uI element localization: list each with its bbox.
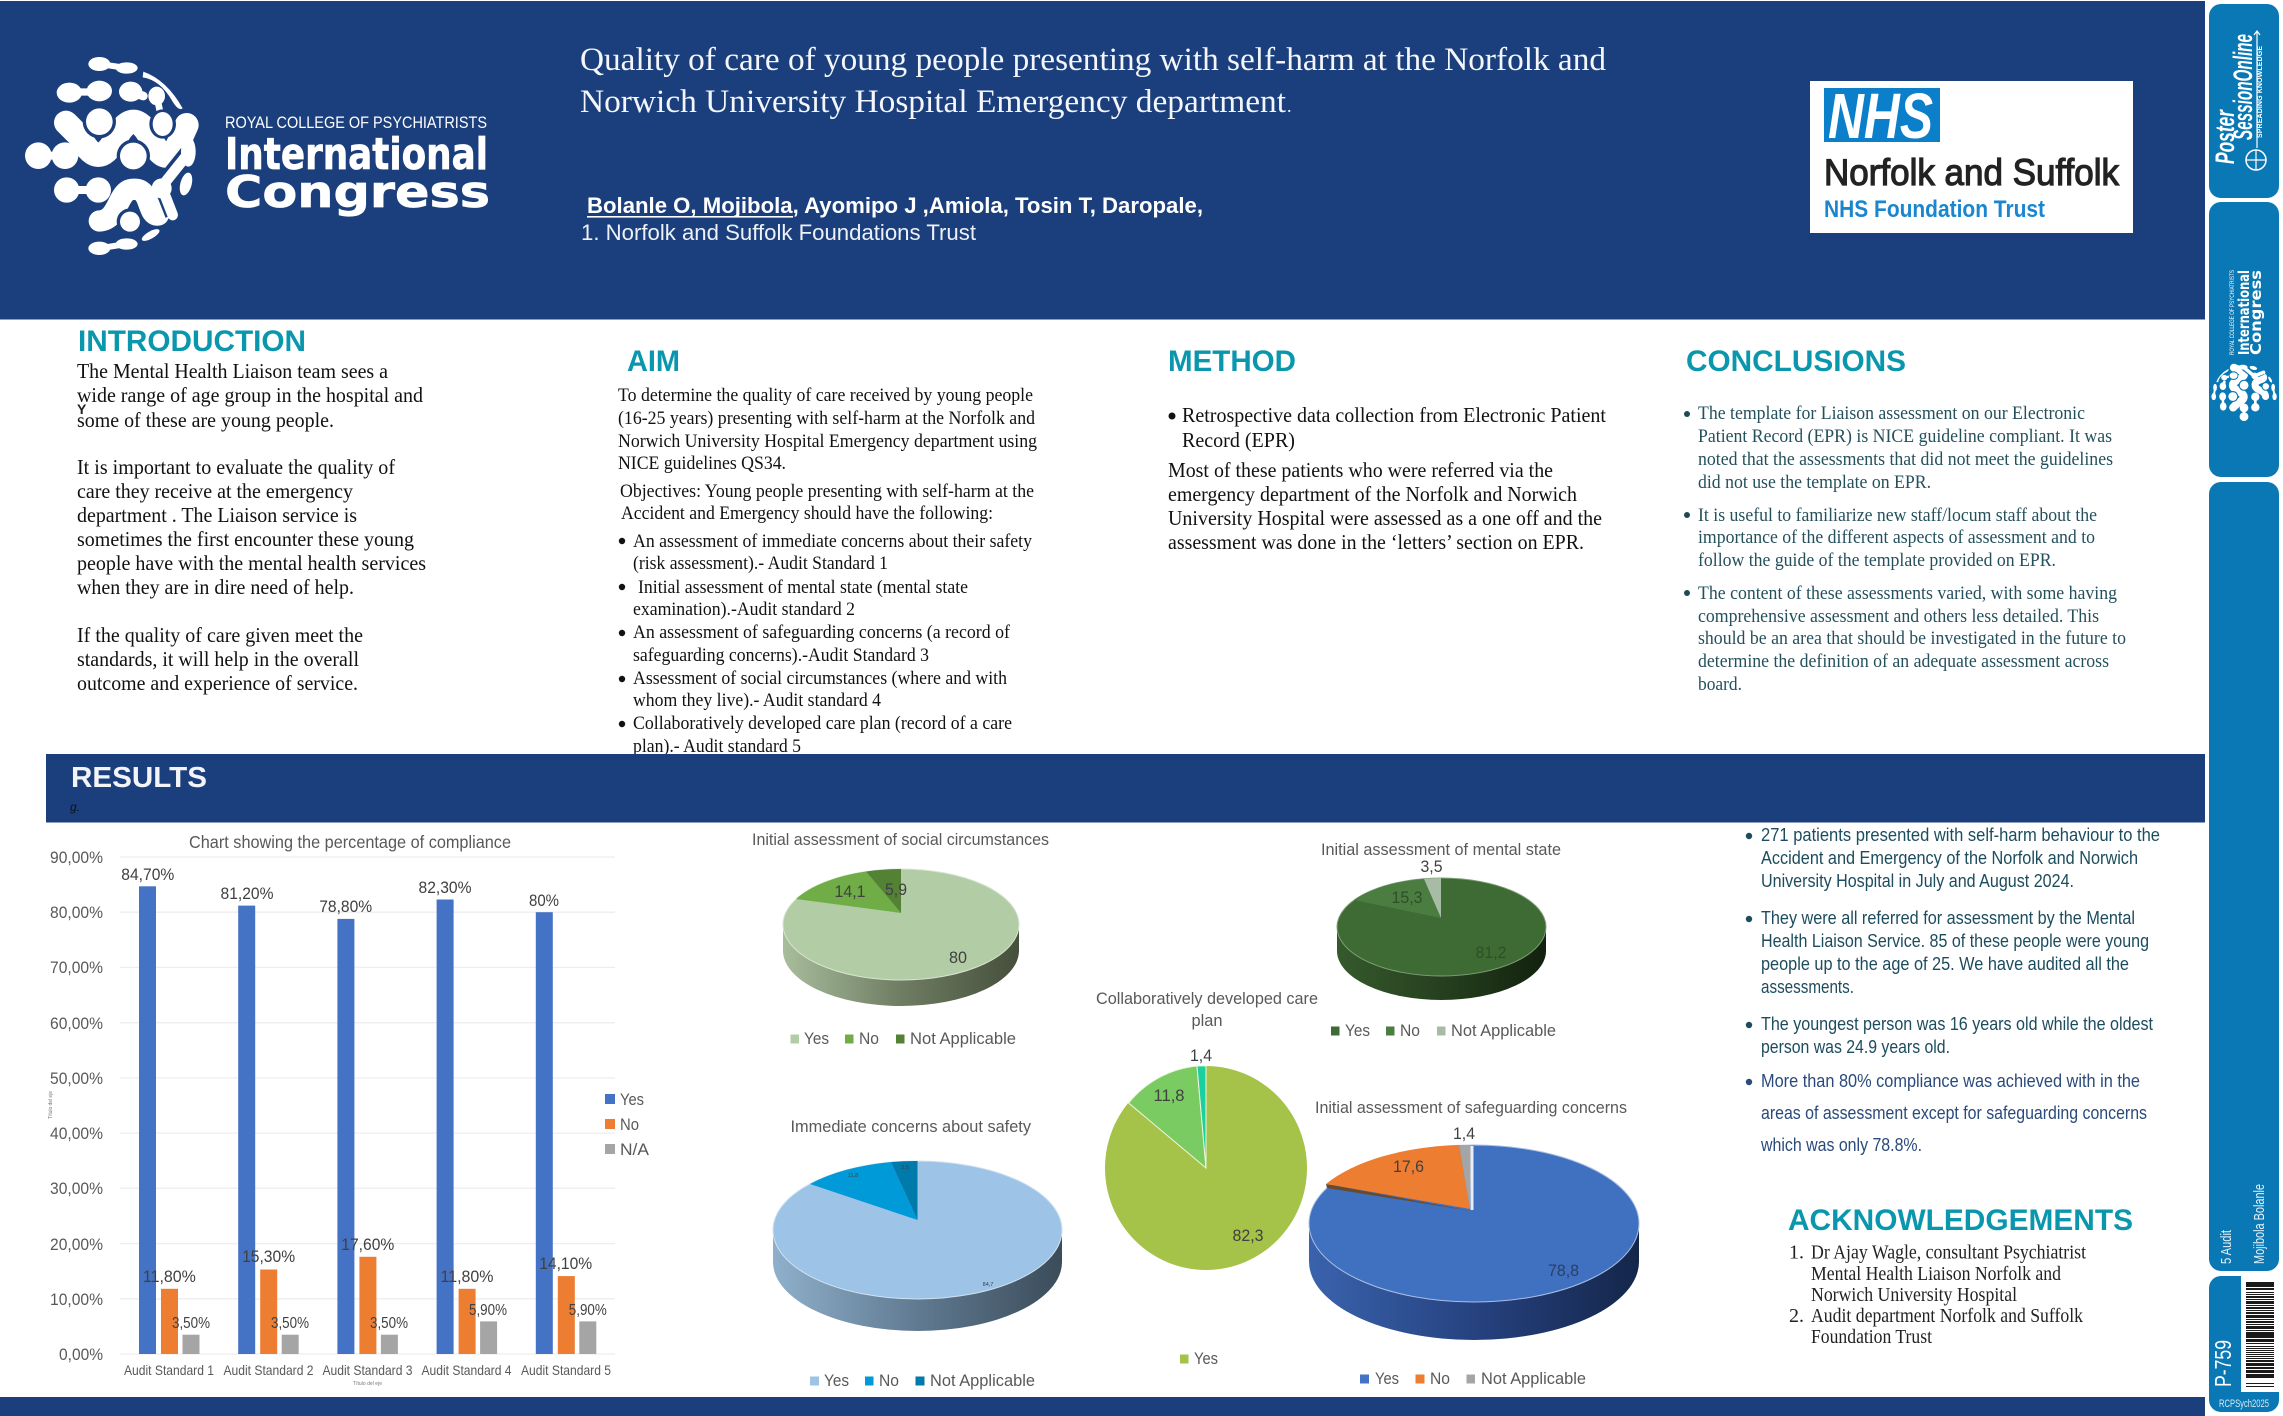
axis titles	[48, 1091, 382, 1387]
icon: congress globe mark	[25, 57, 196, 255]
panel: poster session online: SPREADING KNOWLEDGE	[2257, 46, 2264, 138]
title: Quality of care of young people presenting with self-harm at the Norfolk and	[580, 42, 1606, 78]
y axis labels	[50, 848, 103, 1364]
data labels	[121, 865, 607, 1332]
pie chart: safeguarding concerns	[1309, 1099, 1639, 1388]
pie chart: social circumstances: Yes	[804, 1030, 829, 1048]
panel: international congress: Congress	[2247, 270, 2265, 355]
results banner	[46, 754, 2205, 822]
chart title: Chart showing the percentage of compliance	[189, 832, 511, 852]
text block: introduction	[77, 359, 426, 695]
logo: NHS Norfolk and Suffolk: NHS Foundation Trust	[1824, 196, 2045, 223]
pie chart: social circumstances: 5,9	[885, 881, 907, 899]
list: acknowledgements: 1.	[1789, 1242, 1804, 1264]
text block: aim: To determine the quality of care received by young people	[618, 385, 1033, 406]
text block: results summary: 271 patients presented with self-harm behaviour to the	[1761, 824, 2160, 845]
authors	[581, 193, 1203, 245]
panel: introduction	[77, 325, 426, 695]
list: audit standards: examination).-Audit standard 2	[633, 599, 855, 620]
list: audit standards: plan).- Audit standard 5	[633, 736, 801, 757]
text block: results summary: person was 24.9 years old.	[1761, 1036, 1950, 1057]
pie chart: immediate concerns about safety	[773, 1118, 1062, 1390]
logo wordmark	[225, 113, 490, 218]
logo wordmark: Congress	[225, 167, 490, 218]
text block: introduction: The Mental Health Liaison team sees a	[77, 359, 389, 383]
data labels: 80%	[529, 891, 559, 910]
data labels: 5,90%	[569, 1302, 607, 1319]
list: acknowledgements: Audit department Norfolk and Suffolk	[1811, 1305, 2083, 1327]
panel: poster number and barcode: P-759	[2210, 1340, 2236, 1387]
list: acknowledgements: Foundation Trust	[1811, 1326, 1932, 1348]
panel: international congress	[2209, 202, 2279, 477]
y axis labels: 10,00%	[50, 1290, 103, 1309]
x axis labels: Audit Standard 1	[124, 1362, 214, 1378]
x axis labels: Audit Standard 2	[224, 1362, 314, 1378]
axis titles: Título del eje	[48, 1091, 54, 1119]
text block: introduction: wide range of age group in the hospital and	[77, 383, 423, 407]
text block: introduction: If the quality of care given meet the	[77, 623, 363, 647]
heading: method: METHOD	[1168, 345, 1296, 378]
text block: results summary: Health Liaison Service. 85 of these people were young	[1761, 930, 2149, 951]
pie chart: social circumstances: 14,1	[834, 883, 866, 901]
panel: acknowledgements	[1788, 1204, 2133, 1348]
panel: poster details	[2209, 482, 2279, 1271]
data labels: 11,80%	[143, 1267, 196, 1286]
text block: conclusions: board.	[1698, 674, 1742, 695]
text block: introduction: some of these are young people.	[77, 408, 334, 432]
text block: conclusions: It is useful to familiarize new staff/locum staff about the	[1698, 505, 2097, 526]
legend: No	[620, 1115, 639, 1134]
text block: introduction: department . The Liaison service is	[77, 503, 357, 527]
pie chart: collaboratively developed care plan	[1096, 990, 1318, 1368]
panel: aim	[618, 345, 1037, 757]
text block: results summary: Accident and Emergency of the Norfolk and Norwich	[1761, 847, 2138, 868]
x axis labels: Audit Standard 4	[422, 1362, 512, 1378]
text block: conclusions	[1684, 403, 2126, 695]
bar chart: percentage of compliance	[48, 832, 650, 1387]
axis titles: Título del eje	[353, 1381, 382, 1387]
text block: conclusions: comprehensive assessment and others less detailed. This	[1698, 606, 2099, 627]
text block: method: Retrospective data collection from Electronic Patient	[1182, 403, 1606, 427]
pie chart: social circumstances	[752, 831, 1049, 1048]
text block: method: University Hospital were assessed as a one off and the	[1168, 506, 1602, 530]
y axis labels: 0,00%	[59, 1345, 103, 1364]
y axis labels: 60,00%	[50, 1014, 103, 1033]
authors: 1. Norfolk and Suffolk Foundations Trust	[581, 220, 976, 245]
text block: conclusions: should be an area that should be investigated in the future to	[1698, 628, 2126, 649]
header banner	[0, 1, 2205, 320]
pie chart: immediate concerns about safety: No	[879, 1372, 899, 1390]
list: acknowledgements	[1789, 1242, 2086, 1348]
list: audit standards	[619, 531, 1032, 757]
pie chart: mental state: 15,3	[1392, 889, 1422, 907]
pie chart: collaboratively developed care plan: Collaboratively developed care	[1096, 990, 1318, 1008]
title	[580, 42, 1606, 120]
cursor mark: Y	[77, 401, 87, 417]
heading: acknowledgements: ACKNOWLEDGEMENTS	[1788, 1204, 2133, 1237]
text block: results summary: They were all referred for assessment by the Mental	[1761, 907, 2135, 928]
y axis labels: 50,00%	[50, 1069, 103, 1088]
text block: introduction: It is important to evaluate the quality of	[77, 455, 395, 479]
pie chart: collaboratively developed care plan: 82,3	[1232, 1227, 1264, 1245]
pie chart: safeguarding concerns: Not Applicable	[1481, 1370, 1586, 1388]
pie chart: social circumstances: 80	[949, 949, 967, 967]
pie chart: immediate concerns about safety: Not Applicable	[930, 1372, 1035, 1390]
text block: introduction: care they receive at the emergency	[77, 479, 353, 503]
data labels: 3,50%	[370, 1315, 408, 1332]
heading: introduction: INTRODUCTION	[78, 325, 306, 358]
text block: conclusions: follow the guide of the template provided on EPR.	[1698, 550, 2056, 571]
text block: aim	[618, 385, 1037, 524]
data labels: 14,10%	[539, 1254, 592, 1273]
text block: aim: Objectives: Young people presenting with self-harm at the	[620, 481, 1034, 502]
list: audit standards: whom they live).- Audit standard 4	[633, 690, 881, 711]
text block: method: assessment was done in the ‘letters’ section on EPR.	[1168, 530, 1584, 554]
panel: international congress: ROYAL COLLEGE OF PSYCHIATRISTS	[2229, 270, 2236, 355]
pie chart: social circumstances: Initial assessment of social circumstances	[752, 831, 1049, 849]
bars: no	[161, 1257, 575, 1354]
panel: poster number and barcode	[2209, 1276, 2279, 1412]
list: acknowledgements: 2.	[1789, 1305, 1804, 1327]
text block: conclusions: The content of these assessments varied, with some having	[1698, 583, 2117, 604]
pie chart: mental state: Yes	[1345, 1022, 1370, 1040]
list: audit standards: An assessment of safeguarding concerns (a record of	[633, 622, 1011, 643]
list: audit standards: (risk assessment).- Audit Standard 1	[633, 553, 888, 574]
data labels: 3,50%	[172, 1315, 210, 1332]
pie chart: collaboratively developed care plan: plan	[1192, 1012, 1222, 1030]
text block: aim: Norwich University Hospital Emergency department using	[618, 431, 1037, 452]
text block: results summary: The youngest person was 16 years old while the oldest	[1761, 1013, 2153, 1034]
heading: conclusions: CONCLUSIONS	[1686, 345, 1906, 378]
text block: conclusions: did not use the template on EPR.	[1698, 472, 1931, 493]
authors: Bolanle O, Mojibola, Ayomipo J ,Amiola, Tosin T, Daropale,	[587, 193, 1203, 218]
data labels: 78,80%	[319, 897, 372, 916]
data labels: 5,90%	[469, 1302, 507, 1319]
x axis labels: Audit Standard 3	[322, 1362, 413, 1378]
pie chart: collaboratively developed care plan: 11,8	[1154, 1087, 1184, 1105]
x axis labels: Audit Standard 5	[521, 1362, 611, 1378]
panel: poster details: Mojibola Bolanle	[2251, 1184, 2268, 1264]
y axis labels: 30,00%	[50, 1179, 103, 1198]
pie chart: mental state: Initial assessment of mental state	[1321, 841, 1561, 859]
pie chart: mental state: Not Applicable	[1451, 1022, 1556, 1040]
pie chart: safeguarding concerns: Yes	[1375, 1370, 1399, 1388]
title: Norwich University Hospital Emergency department	[580, 84, 1286, 120]
pie chart: immediate concerns about safety: Yes	[824, 1372, 849, 1390]
heading: aim: AIM	[627, 345, 680, 378]
pie chart: immediate concerns about safety: 3,5	[901, 1165, 909, 1171]
logo: NHS Norfolk and Suffolk	[1810, 80, 2133, 233]
text block: aim: NICE guidelines QS34.	[618, 453, 786, 474]
pie chart: mental state: 3,5	[1420, 858, 1442, 876]
text block: method: Record (EPR)	[1182, 428, 1295, 452]
text block: introduction: sometimes the first encounter these young	[77, 527, 414, 551]
panel: sidebar	[2209, 4, 2279, 1412]
y axis labels: 70,00%	[50, 958, 103, 977]
bottom band	[0, 1397, 2205, 1416]
data labels: 15,30%	[242, 1247, 295, 1266]
list: audit standards: Assessment of social circumstances (where and with	[633, 668, 1007, 689]
text block: results summary: More than 80% compliance was achieved with in the	[1761, 1070, 2140, 1091]
panel: method	[1168, 345, 1606, 554]
pie chart: mental state: No	[1400, 1022, 1420, 1040]
pie chart: mental state	[1321, 841, 1561, 1040]
text block: conclusions: Patient Record (EPR) is NICE guideline compliant. It was	[1698, 426, 2112, 447]
text block: method	[1168, 403, 1606, 554]
text block: results summary: University Hospital in July and August 2024.	[1761, 870, 2074, 891]
y axis labels: 20,00%	[50, 1235, 103, 1254]
legend: N/A	[620, 1140, 650, 1159]
x axis labels	[124, 1362, 611, 1378]
logo wordmark: ROYAL COLLEGE OF PSYCHIATRISTS	[225, 113, 487, 132]
text block: method: Most of these patients who were referred via the	[1168, 458, 1553, 482]
data labels: 11,80%	[440, 1267, 494, 1286]
text block: introduction: when they are in dire need of help.	[77, 575, 354, 599]
list: acknowledgements: Mental Health Liaison Norfolk and	[1811, 1263, 2061, 1285]
legend: Yes	[620, 1090, 644, 1109]
data labels: 84,70%	[121, 865, 174, 884]
list: audit standards: safeguarding concerns).-Audit Standard 3	[633, 645, 929, 666]
list: acknowledgements: Dr Ajay Wagle, consultant Psychiatrist	[1811, 1242, 2086, 1264]
logo: NHS Norfolk and Suffolk: Norfolk and Suffolk	[1824, 152, 2119, 193]
bars: n/a	[182, 1321, 596, 1354]
y axis labels: 90,00%	[50, 848, 103, 867]
title: .	[1287, 96, 1292, 116]
text block: conclusions: importance of the different aspects of assessment and to	[1698, 527, 2095, 548]
results banner: RESULTS	[71, 762, 207, 794]
text block: introduction: standards, it will help in the overall	[77, 647, 359, 671]
pie chart: immediate concerns about safety: 11,8	[848, 1173, 858, 1179]
pie chart: immediate concerns about safety: Immediate concerns about safety	[790, 1118, 1032, 1136]
text block: results summary	[1746, 824, 2160, 1155]
panel: international congress: International	[2235, 270, 2253, 355]
panel: poster details: 5 Audit	[2218, 1229, 2235, 1264]
pie chart: immediate concerns about safety: 84,7	[983, 1282, 993, 1288]
legend	[605, 1090, 650, 1159]
panel: poster session online	[2209, 4, 2279, 198]
pie chart: mental state: 81,2	[1476, 944, 1506, 962]
text block: conclusions: determine the definition of an adequate assessment across	[1698, 651, 2109, 672]
text block: aim: (16-25 years) presenting with self-harm at the Norfolk and	[618, 408, 1035, 429]
list: acknowledgements: Norwich University Hospital	[1811, 1284, 2017, 1306]
list: audit standards: An assessment of immediate concerns about their safety	[633, 531, 1032, 552]
pie chart: safeguarding concerns: 1,4	[1453, 1125, 1475, 1143]
text block: introduction: people have with the mental health services	[77, 551, 426, 575]
pie chart: safeguarding concerns: 78,8	[1548, 1262, 1579, 1280]
text block: results summary: which was only 78.8%.	[1760, 1134, 1922, 1155]
logo: Royal College of Psychiatrists International Congress	[25, 57, 490, 255]
pie chart: safeguarding concerns: Initial assessment of safeguarding concerns	[1315, 1099, 1627, 1117]
pie chart: social circumstances: No	[859, 1030, 879, 1048]
text block: results summary: people up to the age of 25. We have audited all the	[1761, 953, 2129, 974]
text block: results summary: assessments.	[1761, 976, 1854, 997]
text block: conclusions: noted that the assessments that did not meet the guidelines	[1698, 449, 2113, 470]
pie chart: safeguarding concerns: 17,6	[1393, 1158, 1424, 1176]
results banner: g.	[70, 800, 80, 814]
y axis labels: 40,00%	[50, 1124, 103, 1143]
panel: poster session online: Poster	[2210, 109, 2240, 164]
y axis labels: 80,00%	[50, 903, 103, 922]
text block: aim: Accident and Emergency should have the following:	[621, 503, 993, 524]
data labels: 82,30%	[418, 878, 472, 897]
pie chart: collaboratively developed care plan: Yes	[1194, 1350, 1218, 1368]
bars: yes	[139, 886, 553, 1354]
list: audit standards: Initial assessment of mental state (mental state	[638, 577, 968, 598]
data labels: 3,50%	[271, 1315, 309, 1332]
text block: method: emergency department of the Norfolk and Norwich	[1168, 482, 1577, 506]
text block: conclusions: The template for Liaison assessment on our Electronic	[1698, 403, 2085, 424]
text block: results summary: areas of assessment except for safeguarding concerns	[1761, 1102, 2147, 1123]
data labels: 81,20%	[220, 884, 274, 903]
logo wordmark: International	[225, 129, 488, 180]
pie chart: collaboratively developed care plan: 1,4	[1190, 1047, 1212, 1065]
logo: NHS Norfolk and Suffolk: NHS	[1828, 80, 1933, 152]
pie chart: safeguarding concerns: No	[1430, 1370, 1450, 1388]
data labels: 17,60%	[341, 1235, 394, 1254]
text block: introduction: outcome and experience of service.	[77, 671, 358, 695]
list: audit standards: Collaboratively developed care plan (record of a care	[633, 713, 1012, 734]
panel: conclusions	[1684, 345, 2126, 695]
pie chart: social circumstances: Not Applicable	[910, 1030, 1016, 1048]
